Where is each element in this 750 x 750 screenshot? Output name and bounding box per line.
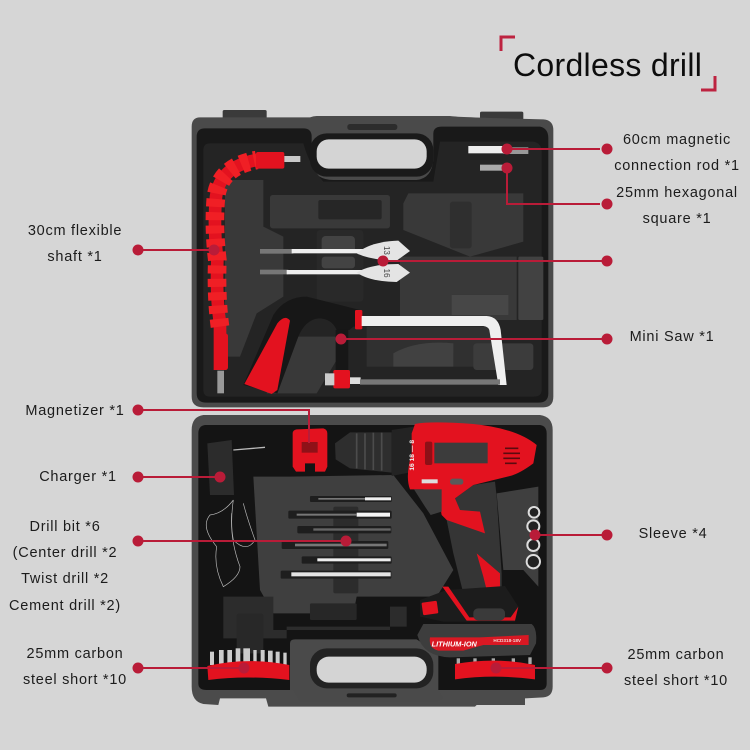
case shell — [192, 415, 553, 707]
case latches — [223, 110, 523, 124]
callout: magnetic connection rod: 60cm magnetic — [623, 132, 731, 148]
callout: charger: Charger *1 — [39, 469, 117, 485]
title — [501, 37, 715, 90]
handle opening — [290, 639, 443, 702]
callout: drill bits: Twist drill *2 — [21, 571, 109, 587]
callout: magnetizer: Magnetizer *1 — [25, 403, 125, 419]
callout: mini saw — [336, 329, 714, 345]
icon: magnetizer — [293, 428, 327, 472]
icon: charger and cord — [206, 440, 265, 587]
callout: magnetic connection rod: connection rod *1 — [614, 158, 740, 174]
callout: left carbon steel short — [23, 646, 250, 688]
callout: hexagonal square — [502, 162, 738, 227]
callout: flexible shaft: shaft *1 — [47, 249, 103, 265]
callout: left carbon steel short: 25mm carbon — [27, 646, 123, 662]
callout: flexible shaft — [28, 223, 220, 265]
callout: hexagonal square: square *1 — [643, 211, 711, 227]
icon: drill bits — [281, 496, 392, 579]
callout: left carbon steel short: steel short *10 — [23, 672, 127, 688]
callout: drill bits — [9, 519, 352, 614]
callout: drill bits: Drill bit *6 — [29, 519, 101, 535]
title: Cordless drill — [513, 47, 702, 83]
handle opening — [310, 133, 433, 177]
icon: spade bits: 16 — [382, 269, 391, 278]
icon: right bit holder — [455, 657, 535, 679]
icon: cordless drill: 16 18 — 8 — [409, 440, 416, 471]
callout: charger — [39, 469, 226, 485]
callout: right carbon steel short: 25mm carbon — [628, 647, 724, 663]
moulded tray — [225, 180, 543, 393]
callout: right carbon steel short: steel short *10 — [624, 673, 728, 689]
icon: left bit holder — [207, 648, 289, 680]
panel: open case upper half with accessories — [192, 110, 553, 407]
callout: flexible shaft: 30cm flexible — [28, 223, 122, 239]
callout: spade bits — [378, 256, 612, 266]
callout: sleeve: Sleeve *4 — [639, 526, 707, 542]
icon: cordless drill: LITHIUM-ION — [432, 640, 478, 649]
icon: cordless drill: HCD318-18V — [493, 638, 522, 643]
callout: magnetizer — [25, 403, 309, 443]
callout: drill bits: Cement drill *2) — [9, 598, 121, 614]
callout: magnetic connection rod — [502, 132, 740, 174]
callout: mini saw: Mini Saw *1 — [630, 329, 714, 345]
icon: mini saw — [243, 297, 507, 394]
callout: hexagonal square: 25mm hexagonal — [616, 185, 738, 201]
icon: sleeves — [527, 507, 540, 568]
callout: right carbon steel short — [490, 647, 728, 689]
moulded tray — [223, 475, 538, 653]
icon: spade bits — [260, 241, 410, 282]
icon: flexible shaft — [214, 152, 300, 393]
callout: drill bits: (Center drill *2 — [13, 545, 117, 561]
panel: open case lower half with drill — [192, 415, 553, 707]
icon: spade bits: 13 — [382, 246, 391, 255]
icon: magnetic rod and hex square — [468, 146, 528, 171]
icon: cordless drill — [335, 422, 537, 657]
case shell — [192, 116, 553, 407]
callout: sleeve — [530, 526, 707, 542]
